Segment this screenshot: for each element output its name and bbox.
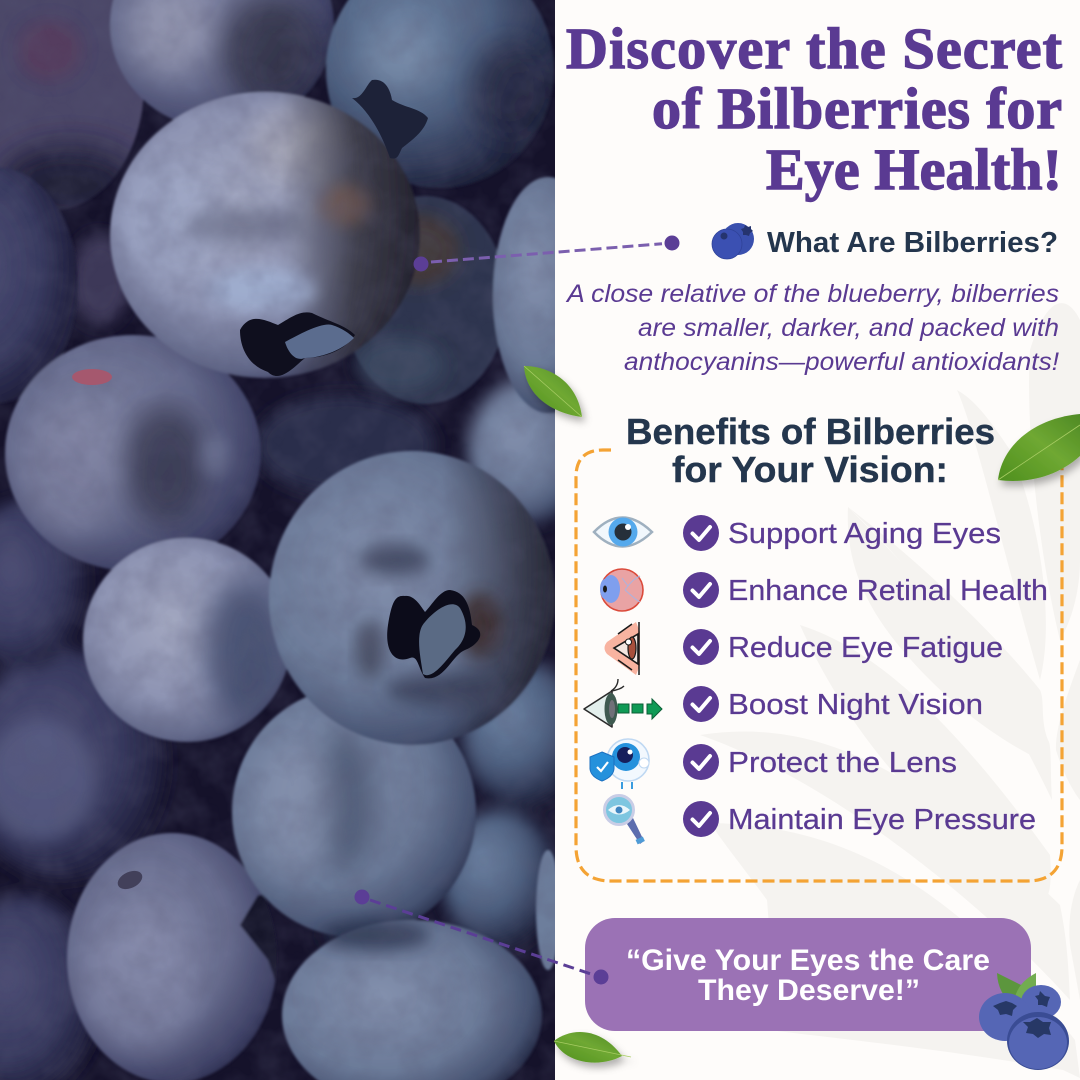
icon: leaf on photo edge (524, 366, 582, 417)
berry middle left (0, 330, 270, 580)
icon: eye with arrow (584, 679, 662, 727)
berry bottom left (66, 832, 276, 1080)
berry big (265, 450, 560, 750)
photo: close-up of bilberries (0, 0, 603, 1080)
text block: bilberries description (565, 280, 1059, 376)
row: Boost Night Vision: Boost Night Vision (728, 689, 983, 721)
row: Reduce Eye Fatigue: Reduce Eye Fatigue (728, 632, 1003, 664)
dashed panel: benefits (576, 450, 1062, 881)
callout: care quote: They Deserve!” (698, 974, 920, 1007)
panel: benefits list (584, 515, 1048, 844)
icon: retina cross-section (600, 569, 643, 611)
text block: bilberries description: are smaller, darker, and packed with (638, 314, 1059, 342)
berry top center (109, 0, 335, 120)
connector: care quote (354, 890, 608, 984)
callout: care quote (585, 918, 1031, 1031)
berry main (105, 85, 425, 385)
in-focus berries (0, 0, 603, 1080)
title: Eye Health! (766, 137, 1062, 202)
icon: magnifying glass with eye (604, 796, 645, 844)
title: Discover the Secret (566, 16, 1063, 81)
icon: leaf top right of panel (998, 414, 1080, 481)
berry bottom center (282, 920, 542, 1080)
title (566, 16, 1063, 202)
row: Protect the Lens: Protect the Lens (728, 747, 957, 779)
icon: eye (594, 518, 652, 546)
title: of Bilberries for (652, 76, 1062, 141)
icon: bilberry cluster (979, 973, 1069, 1070)
icon: eye side view with fatigue (604, 622, 640, 675)
mottled texture (0, 0, 555, 1080)
berry calyx openings (72, 80, 480, 893)
row: Protect the Lens (683, 744, 957, 780)
heading: Benefits of Bilberries: for Your Vision: (672, 449, 948, 490)
berry top left (0, 0, 144, 210)
icon: leaf bottom (554, 1032, 631, 1063)
icon: eye mascot with shield (590, 739, 649, 789)
callout: care quote: “Give Your Eyes the Care (626, 944, 990, 977)
blurred background berries (0, 235, 592, 1080)
icon: bilberries (712, 223, 754, 259)
background palm-leaf pattern (700, 303, 1080, 1078)
connector: What Are Bilberries (414, 236, 680, 272)
text block: bilberries description: anthocyanins—powerful antioxidants! (624, 348, 1059, 376)
heading: What Are Bilberries?: What Are Bilberries? (767, 227, 1058, 259)
berry top right (320, 0, 560, 190)
text block: bilberries description: A close relative of the blueberry, bilberries (565, 280, 1059, 308)
heading: Benefits of Bilberries: Benefits of Bilberries (626, 411, 995, 452)
heading: Benefits of Bilberries (626, 411, 995, 490)
berry lower middle (230, 696, 477, 936)
row: Maintain Eye Pressure: Maintain Eye Pressure (728, 804, 1036, 836)
row: Support Aging Eyes: Support Aging Eyes (728, 518, 1001, 550)
row: Enhance Retinal Health: Enhance Retinal Health (728, 575, 1048, 607)
berry small light (81, 536, 288, 744)
